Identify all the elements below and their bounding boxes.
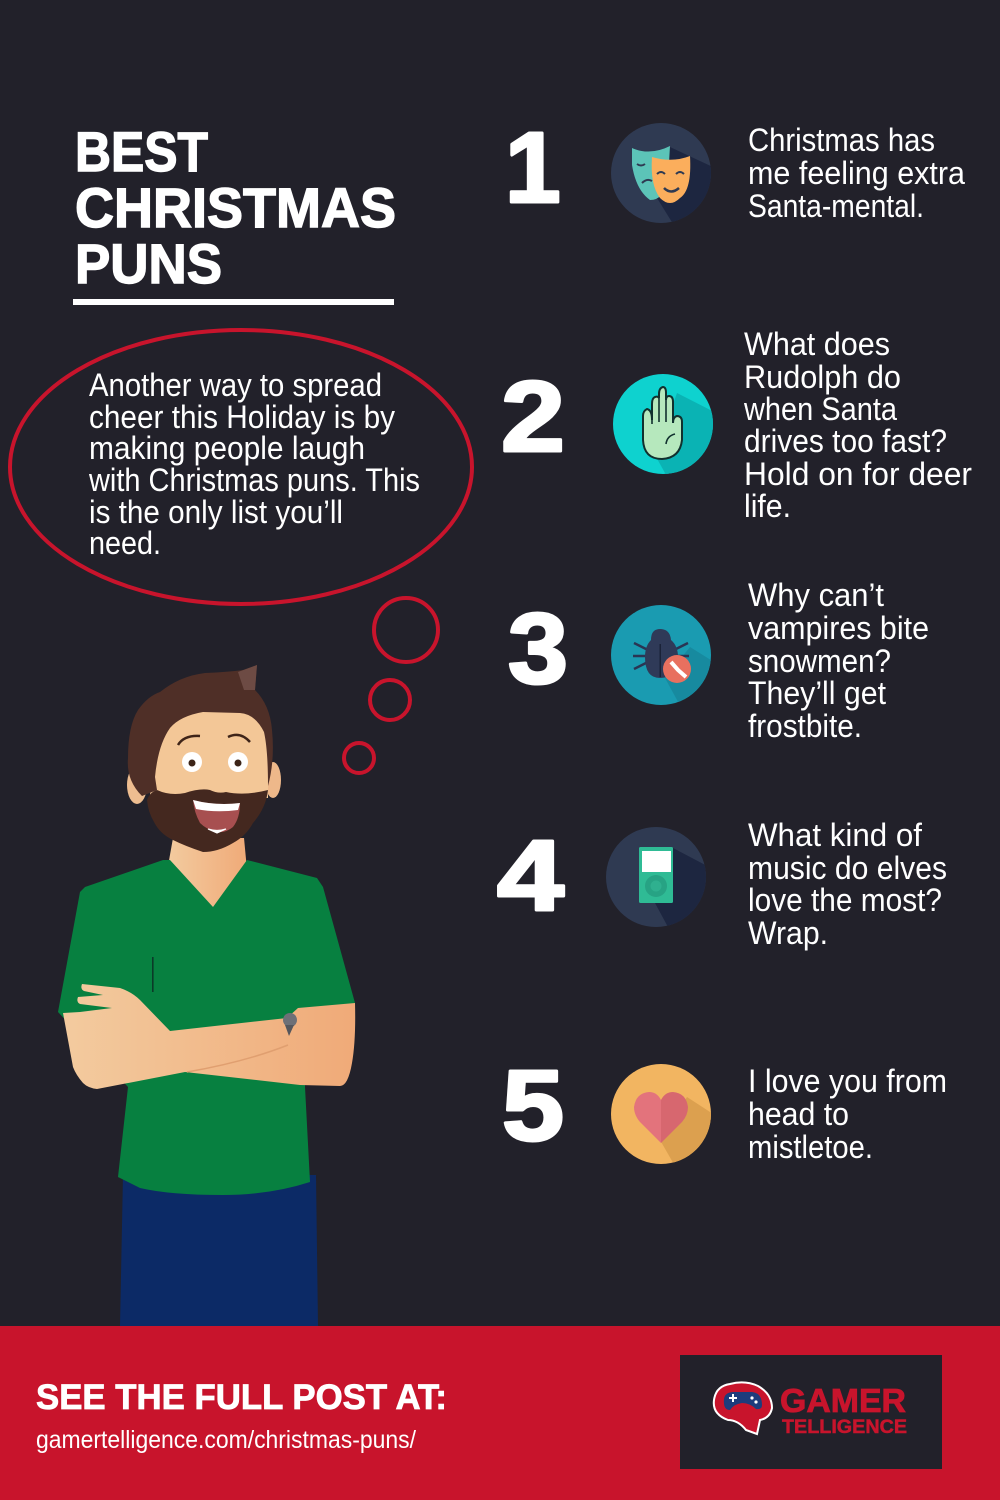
shirt crease [152,957,154,992]
number 3: 3 [508,593,568,705]
icon: theatre masks [611,123,711,223]
pun 2 text: Hold on for deer [744,456,972,492]
right ear [265,762,281,798]
logo wordmark: GAMER [780,1382,906,1419]
thought bubble [10,330,472,773]
logo icon: brain with gamepad [714,1382,772,1434]
pun 5 text: I love you from [748,1063,947,1099]
title: PUNS [75,232,222,295]
item 1 [510,123,965,223]
bubble text: with Christmas puns. This [88,462,420,498]
bubble text: cheer this Holiday is by [89,399,395,435]
pun 4 text: music do elves [748,850,947,886]
forearm crease [187,1045,288,1072]
pun 2 text: What does [744,326,890,362]
pun 3 text: They’ll get [748,675,886,711]
logo wordmark [780,1382,907,1438]
number 5: 5 [502,1050,564,1162]
bubble text: need. [89,525,161,561]
number 1: 1 [505,112,561,224]
pun 1 text: Santa-mental. [748,188,924,224]
title [73,120,396,305]
pun 2 text: Rudolph do [744,359,901,395]
pun 2 text: when Santa [743,391,897,427]
pun 4 text: What kind of [748,817,922,853]
pun 5 text [748,1063,947,1165]
bubble text [88,367,420,561]
item 4 [497,817,947,951]
pun 4 text [748,817,947,951]
pun 4 text: Wrap. [748,915,828,951]
number 2: 2 [501,361,565,473]
watch [283,1013,297,1036]
pun 3 text: snowmen? [748,643,891,679]
bubble text: making people laugh [89,430,365,466]
pun 4 text: love the most? [748,882,942,918]
beard [147,789,268,852]
title: BEST [75,120,208,183]
pun 1 text [748,122,965,224]
title: CHRISTMAS [75,176,396,239]
pun 2 text [743,326,972,524]
item 5 [504,1064,946,1164]
pun 3 text: vampires bite [748,610,929,646]
logo [680,1355,942,1469]
pun 3 text: Why can’t [748,577,884,613]
icon: heart [611,1064,711,1164]
pun 5 text: mistletoe. [748,1129,873,1165]
pun 3 text: frostbite. [748,708,862,744]
mouth [193,800,240,833]
eyes [178,735,250,772]
arms and hand [63,984,355,1089]
number 4: 4 [497,820,564,932]
pun 2 text: life. [744,488,791,524]
icon: bug with wrench [611,605,711,705]
trousers [120,1175,318,1326]
item 3 [508,577,929,744]
footer heading: SEE THE FULL POST AT: [36,1378,447,1417]
pun 1 text: Christmas has [748,122,935,158]
neck [168,838,247,908]
illustration: bearded man with crossed arms [58,665,355,1326]
pun 1 text: me feeling extra [748,155,965,191]
footer url: gamertelligence.com/christmas-puns/ [36,1426,416,1454]
item 2 [501,326,972,524]
face [150,705,268,798]
shirt [58,860,355,1195]
logo wordmark: TELLIGENCE [782,1417,907,1438]
bubble text: Another way to spread [89,367,382,403]
hair highlight [238,665,257,690]
left ear [127,766,147,804]
pun 5 text: head to [748,1096,849,1132]
footer banner [0,1326,1000,1500]
hair [128,665,273,796]
icon: raised hand [613,374,713,474]
pun 2 text: drives too fast? [744,423,947,459]
pun 3 text [748,577,929,744]
bubble text: is the only list you’ll [89,494,343,530]
icon: music player [606,827,706,927]
